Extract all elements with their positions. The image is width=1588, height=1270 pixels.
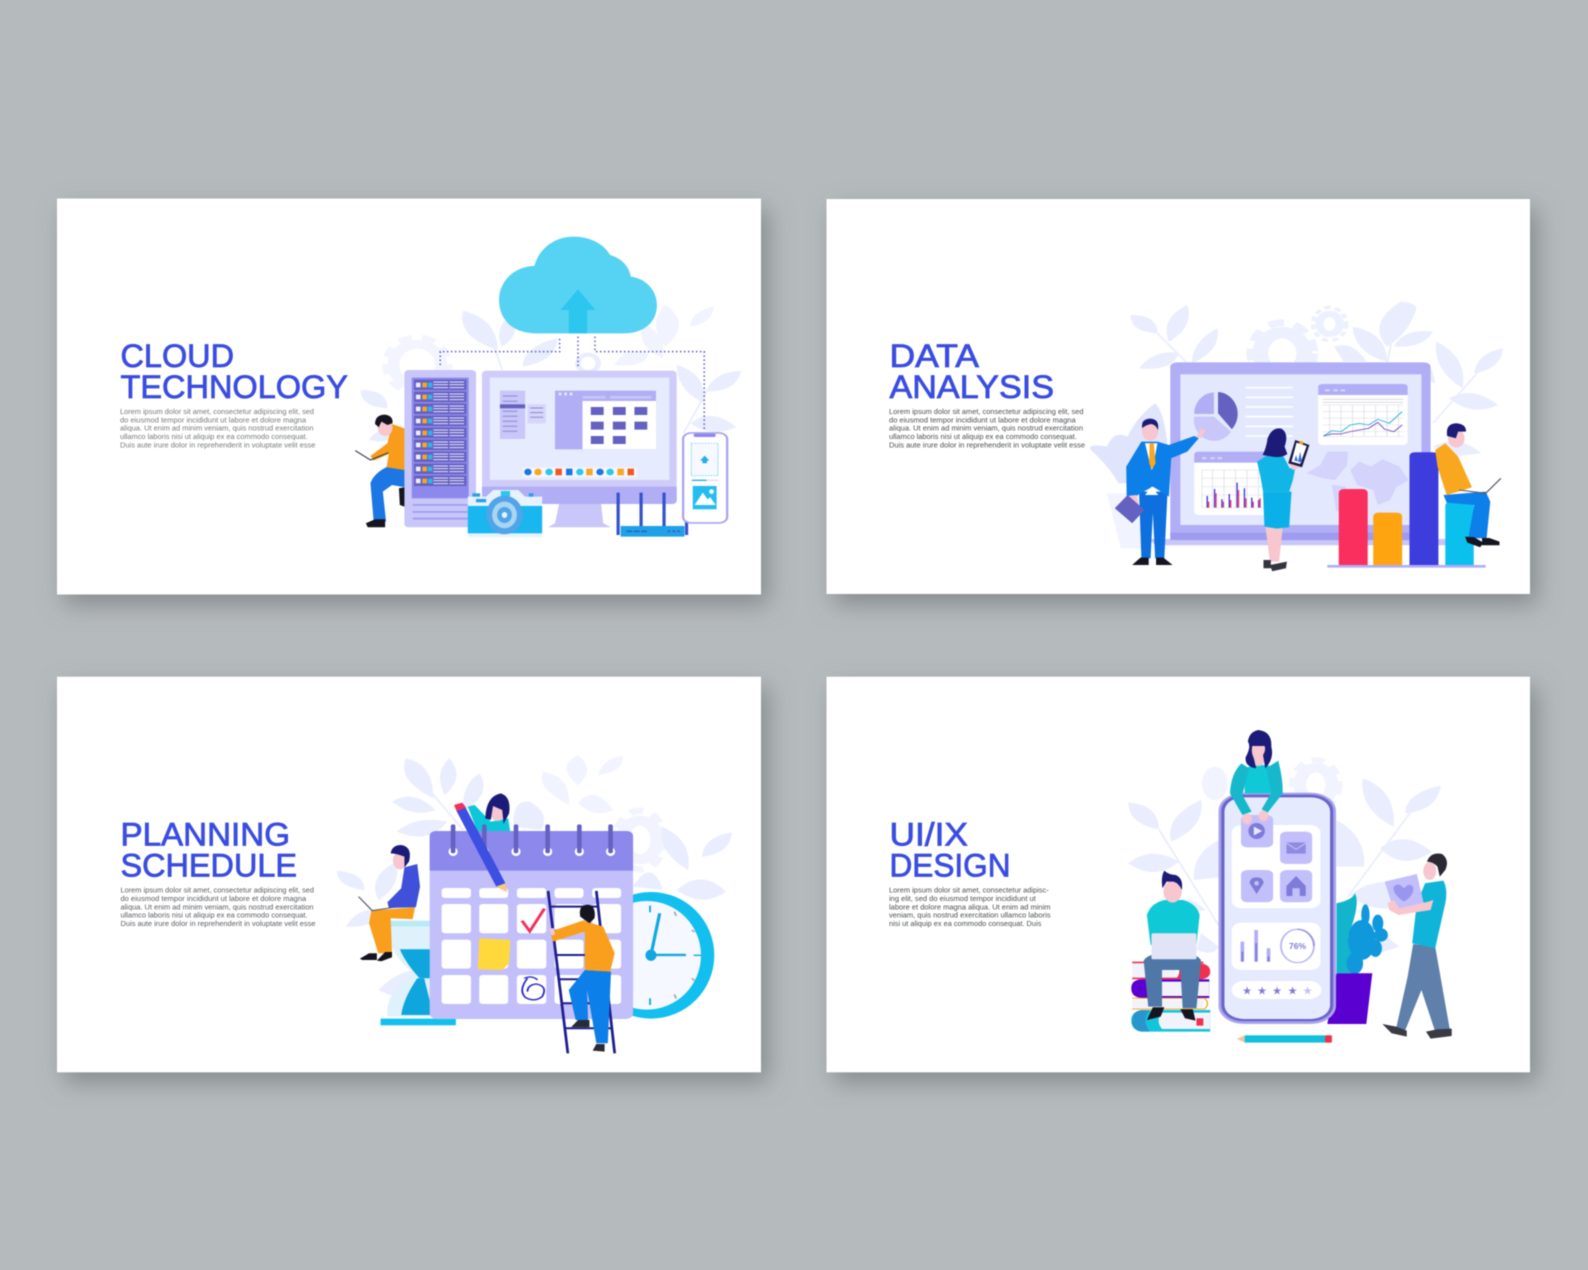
body text: [889, 407, 1085, 450]
woman on phone: [1230, 730, 1283, 824]
body text: ullamco laboris nisi ut aliquip ex ea commodo consequat.: [889, 432, 1077, 441]
illustration: ui/ix design: [1128, 730, 1452, 1043]
woman behind calendar: [468, 793, 510, 858]
rating stars: [1242, 984, 1313, 998]
illustration: cloud technology: [355, 237, 741, 537]
pie chart: [1194, 392, 1238, 441]
person sitting on hourglass: [359, 845, 420, 961]
background leaves, gears and potted plant: [1090, 302, 1503, 548]
heading: ui/ix design: UI/IX: [890, 817, 968, 853]
heading: ui/ix design: [890, 817, 1010, 884]
body text: aliqua. Ut enim ad minim veniam, quis nostrud exercitation: [889, 424, 1083, 433]
heading: planning schedule: [120, 817, 297, 884]
background leaves and gear: [361, 305, 741, 441]
heading: data analysis: DATA: [890, 338, 979, 374]
smartphone: [683, 433, 727, 523]
body text: Duis aute irure dolor in reprehenderit in voluptate velit esse: [120, 919, 316, 928]
body text: do eiusmod tempor incididunt ut labore et dolore magna: [120, 894, 307, 903]
rating stars: ★: [1272, 984, 1282, 998]
body text: aliqua. Ut enim ad minim veniam, quis nostrud exercitation: [120, 424, 314, 433]
rating stars: ★: [1303, 984, 1313, 998]
body text: ing elit, sed do eiusmod tempor incididunt ut: [889, 894, 1037, 903]
bar chart window: [1194, 452, 1268, 515]
heading: ui/ix design: DESIGN: [890, 848, 1010, 884]
heading: data analysis: [890, 338, 1054, 405]
ladder: [548, 891, 615, 1053]
dotted connectors: [440, 337, 704, 430]
pencil: [1237, 1035, 1332, 1043]
heading: planning schedule: SCHEDULE: [120, 848, 297, 884]
body text: [120, 886, 316, 928]
body text: Duis aute irure dolor in reprehenderit in voluptate velit esse: [889, 440, 1085, 450]
body text: ullamco laboris nisi ut aliquip ex ea commodo consequat.: [120, 911, 308, 920]
body text: aliqua. Ut enim ad minim veniam, quis nostrud exercitation: [120, 902, 314, 911]
cloud with upload arrow: [499, 237, 657, 333]
body text: [889, 886, 1051, 928]
heading: data analysis: ANALYSIS: [890, 369, 1054, 405]
check mark: [522, 909, 544, 931]
icon card: [1232, 815, 1320, 908]
line chart window: [1318, 384, 1408, 445]
router: [617, 493, 688, 537]
phone progress label: 76%: [1289, 941, 1306, 951]
body text: veniam, quis nostrud exercitation ullamco laboris: [889, 911, 1051, 920]
body text: [120, 407, 315, 450]
rating stars: ★: [1257, 984, 1267, 998]
rating stars: ★: [1242, 984, 1252, 998]
body text: Lorem ipsum dolor sit amet, consectetur adipiscing elit, sed: [120, 407, 314, 416]
book stack: [1131, 962, 1210, 1032]
potted plant: [1327, 893, 1388, 1024]
woman with tablet: [1257, 428, 1309, 571]
person on bar with laptop: [1435, 423, 1501, 547]
person with laptop: [355, 415, 404, 527]
man holding heart tile: [1382, 854, 1452, 1039]
illustration: data analysis: [1090, 302, 1503, 571]
man with laptop on books: [1144, 871, 1201, 1021]
rating card: [1232, 981, 1321, 999]
stats card: [1232, 923, 1320, 970]
circled date: [522, 977, 544, 1000]
list lines: [1246, 388, 1293, 436]
illustration: planning schedule: [337, 755, 732, 1053]
man in suit: [1115, 419, 1206, 565]
heading: cloud technology: CLOUD: [120, 338, 234, 374]
heading: cloud technology: TECHNOLOGY: [120, 369, 348, 405]
panel: cloud technology: [57, 198, 761, 594]
server rack: [404, 370, 476, 527]
body text: ullamco laboris nisi ut aliquip ex ea commodo consequat.: [120, 432, 308, 441]
bars: [1327, 452, 1486, 568]
body text: Lorem ipsum dolor sit amet, consectetur adipiscing elit, sed: [889, 407, 1084, 416]
body text: do eiusmod tempor incididunt ut labore et dolore magna: [889, 415, 1076, 424]
laptop dashboard: [1151, 362, 1447, 545]
monitor: [482, 371, 677, 527]
background leaves and gear: [337, 755, 732, 997]
body text: Duis aute irure dolor in reprehenderit in voluptate velit esse: [120, 440, 315, 450]
hourglass: [381, 921, 456, 1025]
calendar: [430, 826, 633, 1019]
camera: [468, 490, 542, 537]
body text: do eiusmod tempor incididunt ut labore et dolore magna: [120, 415, 307, 424]
pencil: [454, 803, 507, 892]
background leaves and gear: [1128, 760, 1441, 957]
heading: cloud technology: [120, 338, 348, 405]
body text: Lorem ipsum dolor sit amet, consectetur adipiscing elit, sed: [120, 886, 314, 895]
body text: nisi ut aliquip ex ea commodo consequat. Duis: [889, 919, 1041, 928]
world map: [1307, 452, 1409, 512]
rating stars: ★: [1288, 984, 1298, 998]
sticky note: [478, 938, 510, 970]
phone: [1218, 793, 1336, 1024]
man climbing ladder: [550, 905, 615, 1052]
clock: [588, 892, 714, 1019]
heading: planning schedule: PLANNING: [120, 817, 290, 853]
body text: labore et dolore magna aliqua. Ut enim ad minim: [889, 902, 1050, 911]
panel: ui/ix design: [826, 677, 1530, 1072]
panel: data analysis: [826, 199, 1530, 594]
body text: Lorem ipsum dolor sit amet, consectetur adipisc-: [889, 886, 1049, 895]
panel: planning schedule: [57, 677, 761, 1072]
